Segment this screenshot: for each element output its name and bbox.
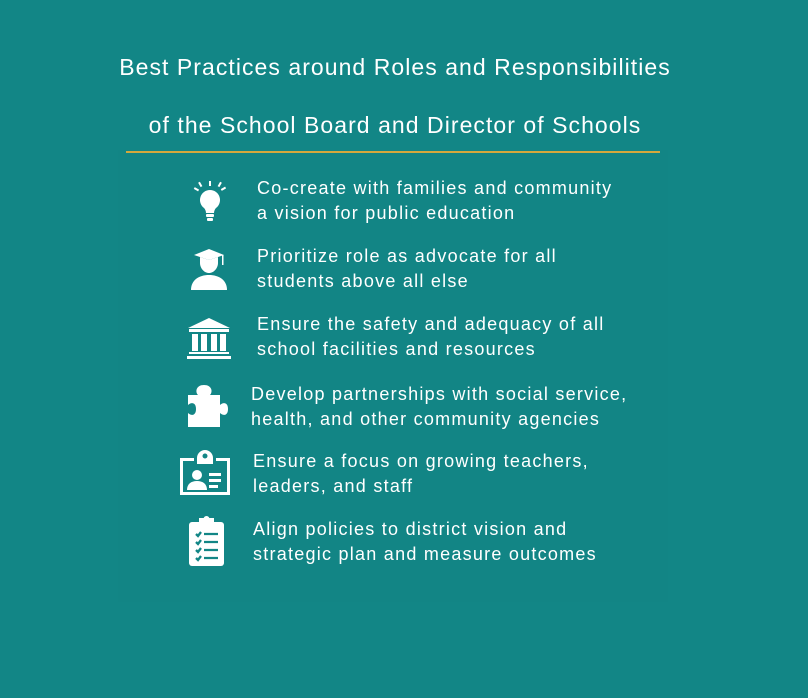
text — [253, 451, 589, 496]
item 6 — [189, 516, 597, 566]
icon: id badge — [180, 450, 230, 495]
text — [251, 384, 627, 429]
item 1 — [194, 178, 612, 223]
text: Ensure a focus on growing teachers, — [253, 451, 589, 471]
item 3 — [187, 314, 604, 359]
text: Develop partnerships with social service, — [251, 384, 627, 404]
title — [119, 54, 671, 138]
text: a vision for public education — [257, 203, 515, 223]
icon: graduate — [191, 249, 227, 290]
text: Align policies to district vision and — [253, 519, 567, 539]
text: strategic plan and measure outcomes — [253, 544, 597, 564]
text: leaders, and staff — [253, 476, 413, 496]
background panel — [118, 150, 668, 602]
text: Ensure the safety and adequacy of all — [257, 314, 604, 334]
text: Co-create with families and community — [257, 178, 612, 198]
title: Best Practices around Roles and Responsibilities — [119, 54, 671, 80]
icon: clipboard — [189, 516, 224, 566]
text — [257, 178, 612, 223]
title: of the School Board and Director of Schools — [149, 112, 641, 138]
icon: building — [187, 318, 231, 359]
text: Prioritize role as advocate for all — [257, 246, 557, 266]
text: school facilities and resources — [257, 339, 536, 359]
text — [257, 246, 557, 291]
item 4 — [188, 384, 627, 429]
icon: puzzle — [188, 385, 228, 427]
text — [253, 519, 597, 564]
item 5 — [180, 450, 589, 496]
text: students above all else — [257, 271, 469, 291]
text — [257, 314, 604, 359]
icon: lightbulb — [194, 181, 226, 221]
text: health, and other community agencies — [251, 409, 600, 429]
item 2 — [191, 246, 557, 291]
